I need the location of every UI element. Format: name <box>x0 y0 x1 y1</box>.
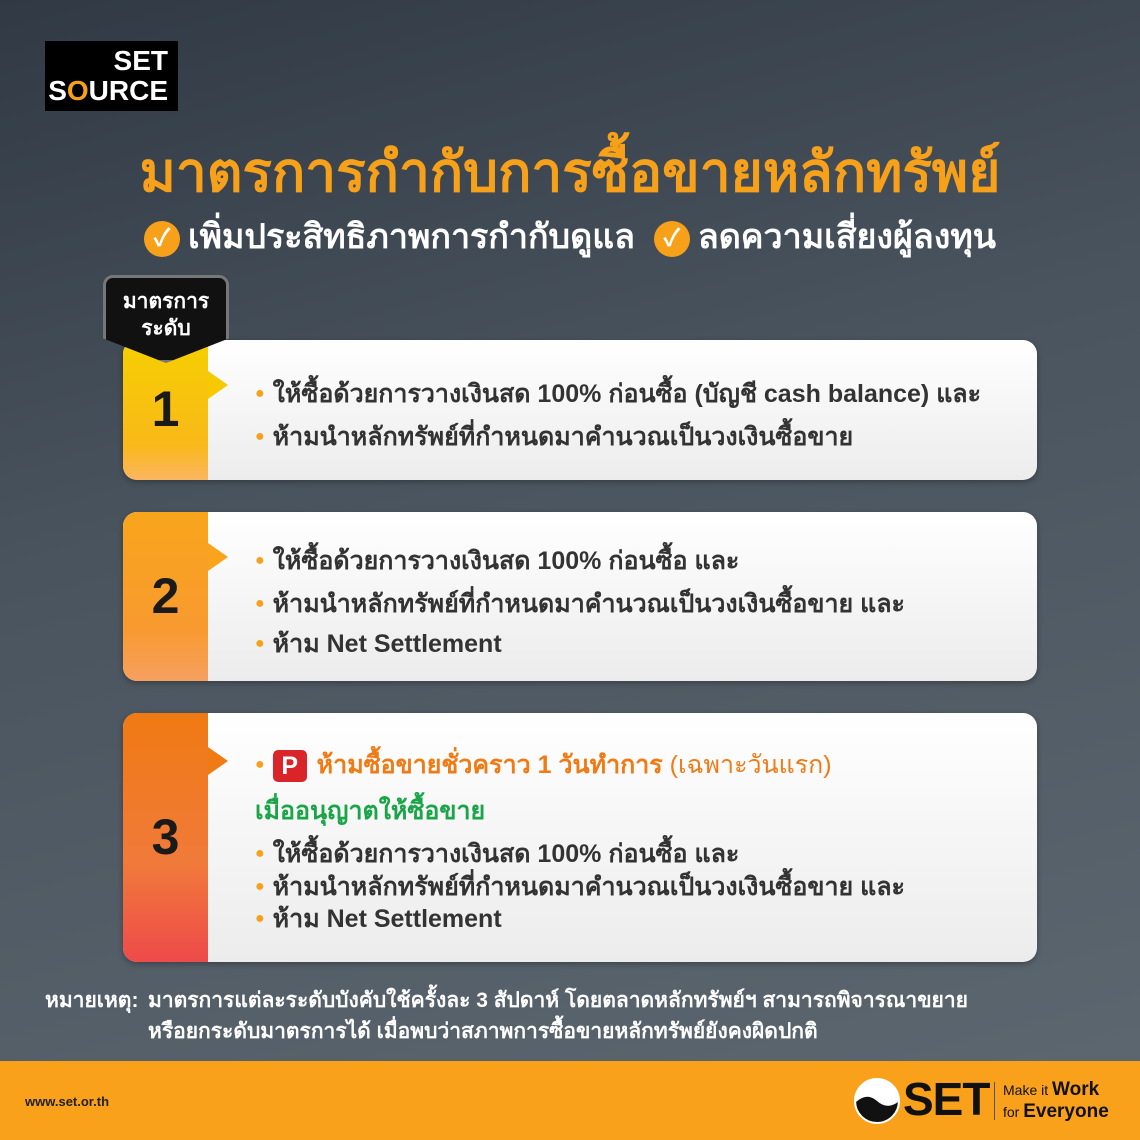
title: มาตรการกำกับการซื้อขายหลักทรัพย์ <box>140 141 1000 203</box>
badge: level <box>103 275 229 363</box>
badge: level: มาตรการ <box>123 290 209 313</box>
footnote: มาตรการแต่ละระดับบังคับใช้ครั้งละ 3 สัปดาห์ โดยตลาดหลักทรัพย์ฯ สามารถพิจารณาขยาย <box>148 989 968 1012</box>
card 2 <box>123 512 1037 681</box>
card 3: ● ห้ามซื้อขายชั่วคราว 1 วันทำการ (เฉพาะวันแรก) <box>255 751 832 779</box>
card 3: 3 <box>152 809 179 865</box>
subtitle: เพิ่มประสิทธิภาพการกำกับดูแล ลดความเสี่ยงผู้ลงทุน <box>188 218 996 256</box>
url: www.set.or.th <box>25 1094 109 1109</box>
card 3: ● ห้าม Net Settlement <box>255 905 502 933</box>
card 2: ● ห้ามนำหลักทรัพย์ที่กำหนดมาคำนวณเป็นวงเงินซื้อขาย และ <box>255 590 905 618</box>
footnote: หมายเหตุ: <box>45 989 138 1012</box>
card 1: ● ห้ามนำหลักทรัพย์ที่กำหนดมาคำนวณเป็นวงเงินซื้อขาย <box>255 423 853 451</box>
card 1: ● ให้ซื้อด้วยการวางเงินสด 100% ก่อนซื้อ (บัญชี cash balance) และ <box>255 380 981 408</box>
card 3: ● ห้ามนำหลักทรัพย์ที่กำหนดมาคำนวณเป็นวงเงินซื้อขาย และ <box>255 873 905 901</box>
logo: SET SOURCE: SET <box>114 45 168 76</box>
card 1: 1 <box>152 381 179 437</box>
card 2: ● ให้ซื้อด้วยการวางเงินสด 100% ก่อนซื้อ และ <box>255 547 739 575</box>
SET logo: for Everyone <box>1003 1101 1109 1122</box>
footnote <box>45 984 968 1043</box>
card 3: P <box>281 752 298 780</box>
subtitle: ✓ <box>153 225 171 252</box>
card 1 <box>123 340 1037 480</box>
card 3 <box>123 713 1037 962</box>
card 3: ● ให้ซื้อด้วยการวางเงินสด 100% ก่อนซื้อ และ <box>255 840 739 868</box>
footer bar <box>0 1061 1140 1140</box>
SET logo <box>854 1073 1109 1125</box>
card 2: ● ห้าม Net Settlement <box>255 630 502 658</box>
SET logo: SET <box>903 1073 989 1125</box>
SET logo: Make it Work <box>1003 1079 1099 1100</box>
card 3: เมื่ออนุญาตให้ซื้อขาย <box>255 797 485 825</box>
logo: SET SOURCE: SOURCE <box>48 75 168 106</box>
logo: SET SOURCE <box>45 41 178 111</box>
badge: level: ระดับ <box>141 317 191 340</box>
card 2: 2 <box>152 568 179 624</box>
footnote: หรือยกระดับมาตรการได้ เมื่อพบว่าสภาพการซื้อขายหลักทรัพย์ยังคงผิดปกติ <box>148 1020 818 1043</box>
subtitle: ✓ <box>663 225 681 252</box>
